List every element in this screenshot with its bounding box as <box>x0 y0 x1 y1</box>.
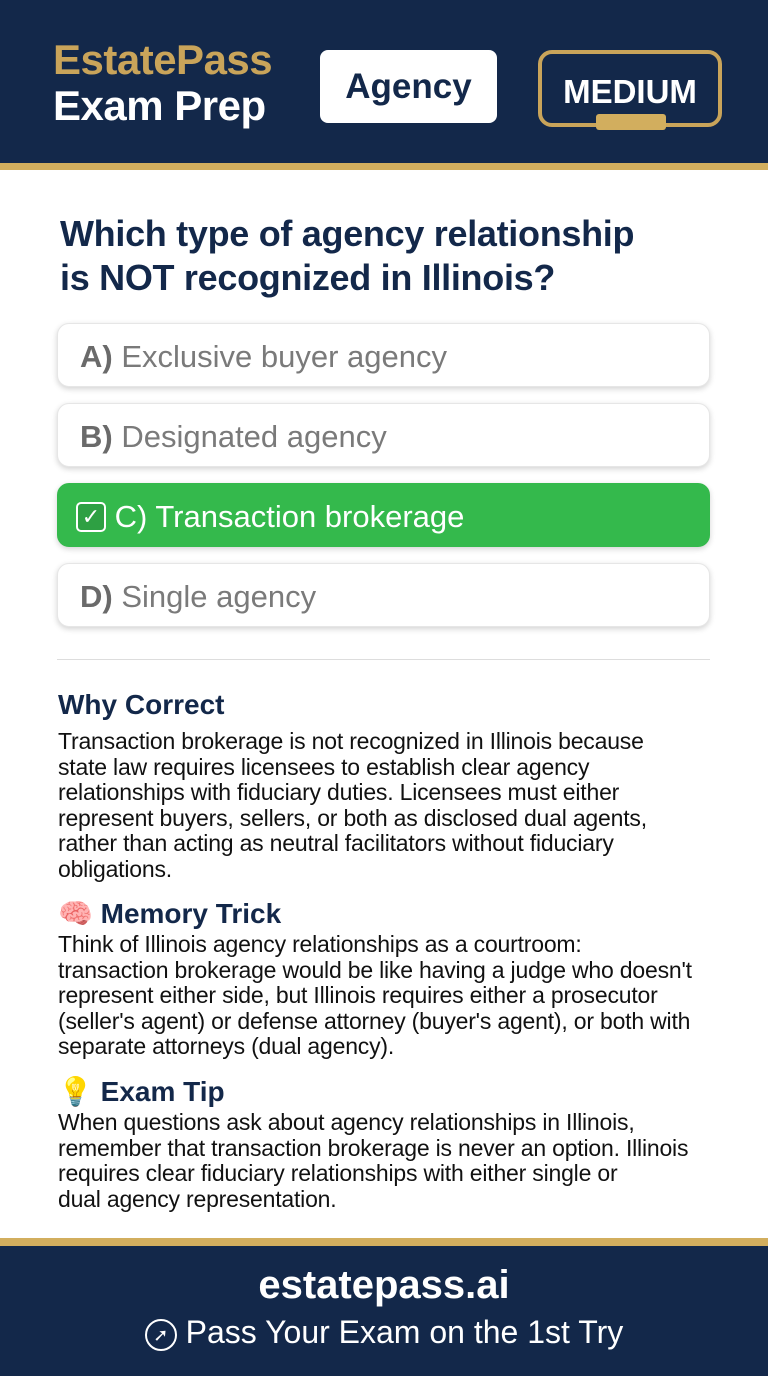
footer <box>0 1238 768 1376</box>
option A: A) Exclusive buyer agency <box>80 339 447 374</box>
text: why correct: rather than acting as neutral facilitators without fiduciary <box>58 830 614 856</box>
brand title: EstatePass <box>53 36 272 83</box>
option D: D) Single agency <box>80 579 316 614</box>
text: why correct: represent buyers, sellers, or both as disclosed dual agents, <box>58 804 647 830</box>
text: memory trick: Think of Illinois agency relationships as a courtroom: <box>58 931 582 957</box>
text: why correct <box>58 728 647 882</box>
option C correct <box>57 483 710 547</box>
brand title <box>53 36 272 129</box>
option B <box>57 403 710 467</box>
text: why correct: relationships with fiduciary duties. Licensees must either <box>58 779 619 805</box>
option A <box>57 323 710 387</box>
text: exam tip: requires clear fiduciary relationships with either single or <box>58 1160 617 1186</box>
topic badge: Agency <box>345 67 472 106</box>
text: memory trick <box>58 931 692 1059</box>
difficulty badge: MEDIUM <box>563 73 697 110</box>
brand title: Exam Prep <box>53 82 266 129</box>
question: Which type of agency relationship <box>60 213 634 254</box>
difficulty badge <box>538 50 722 127</box>
text: exam tip <box>58 1109 688 1212</box>
question <box>60 213 634 298</box>
heading: memory trick: 🧠 Memory Trick <box>58 898 281 929</box>
text: exam tip: dual agency representation. <box>58 1186 336 1212</box>
question: is NOT recognized in Illinois? <box>60 257 555 298</box>
option C correct: ✓ <box>82 504 100 529</box>
footer url: estatepass.ai <box>258 1263 510 1307</box>
footer tagline: ➚ <box>153 1325 168 1345</box>
footer tagline: Pass Your Exam on the 1st Try <box>186 1314 623 1350</box>
text: memory trick: transaction brokerage would be like having a judge who doesn't <box>58 956 692 982</box>
text: exam tip: When questions ask about agency relationships in Illinois, <box>58 1109 635 1135</box>
text: memory trick: (seller's agent) or defense attorney (buyer's agent), or both with <box>58 1008 690 1034</box>
text: exam tip: remember that transaction brokerage is never an option. Illinois <box>58 1134 688 1160</box>
heading: why correct: Why Correct <box>58 689 224 720</box>
text: memory trick: represent either side, but Illinois requires either a prosecutor <box>58 982 658 1008</box>
option D <box>57 563 710 627</box>
text: why correct: obligations. <box>58 856 172 882</box>
text: why correct: Transaction brokerage is not recognized in Illinois because <box>58 728 644 754</box>
text: why correct: state law requires licensees to establish clear agency <box>58 754 589 780</box>
option B: B) Designated agency <box>80 419 387 454</box>
option C correct: C) Transaction brokerage <box>115 499 464 534</box>
topic badge <box>320 50 497 123</box>
text: memory trick: separate attorneys (dual agency). <box>58 1033 394 1059</box>
heading: exam tip: 💡 Exam Tip <box>58 1076 225 1107</box>
header <box>0 0 768 170</box>
